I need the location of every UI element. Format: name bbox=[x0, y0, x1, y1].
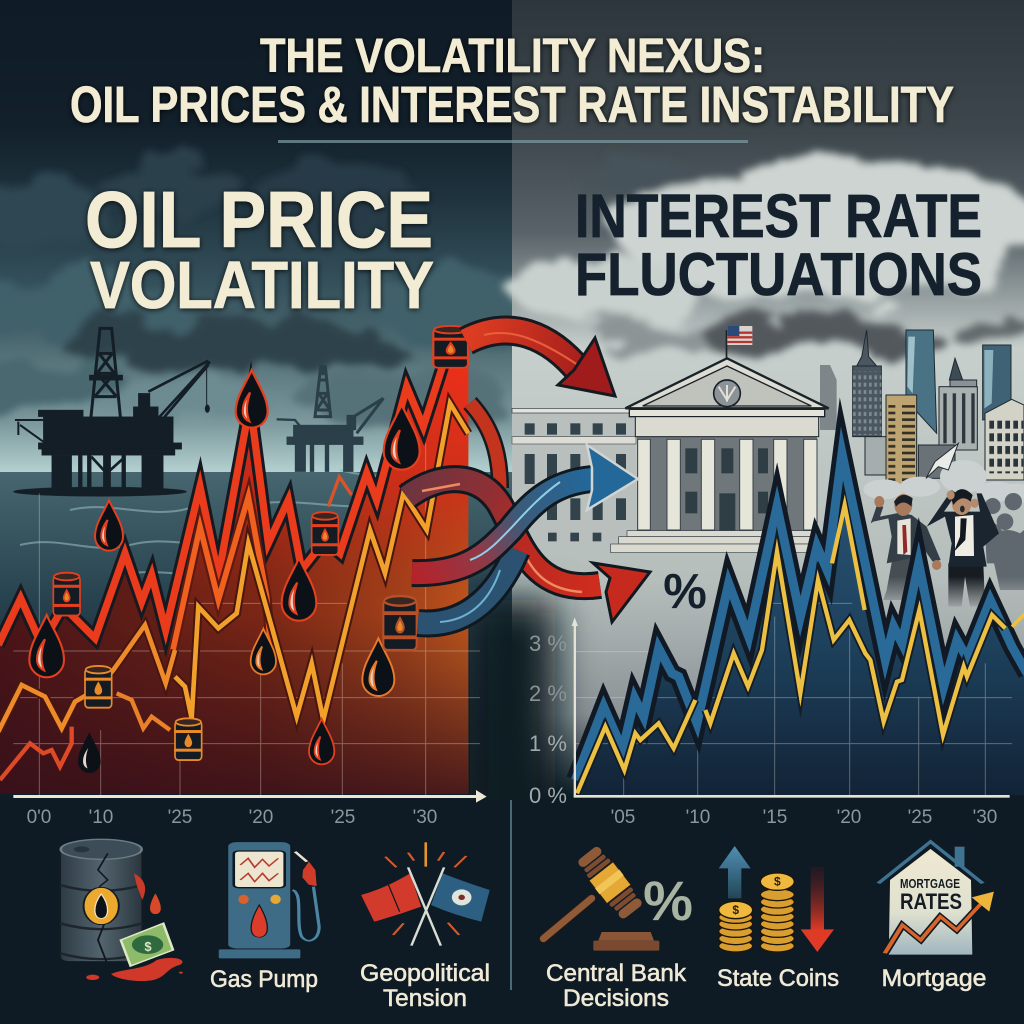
heading: interest rate fluctuations bbox=[575, 182, 982, 308]
mortgage sign text: RATES bbox=[900, 889, 962, 914]
mortgage sign text: MORTGAGE bbox=[900, 876, 960, 891]
distant oil rig bbox=[277, 365, 383, 472]
icon: mortgage house bbox=[878, 842, 994, 955]
skyline bbox=[820, 330, 1024, 487]
title: THE VOLATILITY NEXUS: bbox=[260, 30, 765, 83]
faint rising segment bbox=[328, 477, 352, 507]
chart area fill bbox=[0, 343, 468, 794]
icon: tall coin stack: $ bbox=[774, 875, 781, 889]
oil barrels on chart bbox=[53, 326, 468, 760]
icon: tall coin stack bbox=[760, 873, 794, 952]
left x axis labels: '30 bbox=[413, 807, 437, 828]
bottom icons row bbox=[60, 839, 994, 981]
mortgage sign text bbox=[900, 876, 962, 914]
footer band bbox=[0, 800, 1024, 1024]
icon: gas pump bbox=[219, 842, 319, 958]
icon captions: Decisions bbox=[563, 985, 669, 1012]
icon captions: Gas Pump bbox=[210, 966, 318, 993]
left x axis labels: '20 bbox=[249, 807, 273, 828]
left x axis labels bbox=[27, 807, 437, 828]
left y axis labels: 3 % bbox=[529, 631, 567, 656]
right x axis labels: '25 bbox=[908, 807, 932, 828]
x axis bbox=[13, 790, 487, 803]
curling red tail behind chart bbox=[470, 403, 500, 488]
heading: oil price volatility bbox=[85, 175, 434, 323]
icon captions: State Coins bbox=[717, 965, 839, 992]
icon: red down arrow bbox=[801, 867, 834, 952]
left illustration: offshore oil rigs bbox=[13, 328, 383, 496]
icon: short coin stack: $ bbox=[732, 903, 739, 917]
heading: oil price volatility: OIL PRICE bbox=[85, 175, 433, 264]
torn umbrella bbox=[926, 443, 958, 478]
man with raised fist bbox=[871, 494, 941, 600]
heading: oil price volatility: VOLATILITY bbox=[90, 248, 434, 323]
chart axes bbox=[572, 617, 1010, 798]
icon: cracked oil barrel bbox=[60, 839, 183, 981]
left y axis labels: 0 % bbox=[529, 783, 567, 808]
title divider bbox=[278, 140, 748, 143]
icon captions: Geopolitical bbox=[360, 960, 490, 987]
lower red line bbox=[0, 727, 72, 780]
heading: interest rate fluctuations: FLUCTUATIONS bbox=[575, 241, 982, 308]
panel divider bbox=[510, 800, 512, 990]
connecting arrows bbox=[407, 331, 650, 623]
dollar note symbol: $ bbox=[144, 939, 152, 954]
band from lower oil barrel bbox=[418, 550, 517, 623]
right x axis labels: '15 bbox=[763, 807, 787, 828]
chart area fill bbox=[575, 453, 1024, 795]
icon captions: Tension bbox=[383, 985, 467, 1012]
smoke cloud bbox=[863, 460, 1024, 503]
left wing bbox=[512, 408, 636, 548]
oil price line: red bbox=[0, 353, 447, 645]
icon: gavel bbox=[543, 844, 659, 951]
flag bbox=[726, 326, 752, 360]
right x axis labels: '05 bbox=[611, 807, 635, 828]
left y axis labels bbox=[529, 631, 567, 808]
right x axis labels: '10 bbox=[686, 807, 710, 828]
skyline and panicked crowd bbox=[820, 330, 1024, 610]
oil drops on chart bbox=[29, 370, 420, 773]
percent symbol: % bbox=[663, 565, 707, 619]
chart grid bbox=[575, 603, 1012, 795]
icon: blue up arrow bbox=[719, 846, 751, 898]
icons: gavel, coins and arrows bbox=[543, 844, 834, 952]
right x axis labels: '30 bbox=[973, 807, 997, 828]
left x axis labels: 0'0 bbox=[27, 807, 51, 828]
icon captions bbox=[210, 960, 986, 1012]
secondary line: orange red bbox=[166, 497, 271, 683]
arrow: curved red to percent bbox=[407, 479, 650, 622]
illustration: federal reserve bank bbox=[512, 326, 829, 553]
left x axis labels: '25 bbox=[168, 807, 192, 828]
left x axis labels: '25 bbox=[331, 807, 355, 828]
rate line: blue bbox=[575, 453, 1024, 780]
arrow: curved blue to bank bbox=[412, 445, 638, 573]
oil price line chart bbox=[0, 326, 487, 803]
fog at feet bbox=[863, 577, 1024, 610]
main oil rig bbox=[13, 328, 210, 496]
percent sign beside gavel: % bbox=[643, 869, 693, 932]
right x axis labels bbox=[611, 807, 997, 828]
panel: interest rate background bbox=[470, 0, 1024, 860]
amber line bbox=[0, 403, 468, 732]
right x axis labels: '20 bbox=[837, 807, 861, 828]
icon captions: Mortgage bbox=[882, 965, 986, 992]
left y axis labels: 2 % bbox=[529, 681, 567, 706]
interest rate line chart bbox=[572, 453, 1024, 798]
left y axis labels: 1 % bbox=[529, 731, 567, 756]
icon captions: Central Bank bbox=[546, 960, 687, 987]
title bbox=[70, 30, 954, 133]
background crowd bbox=[985, 493, 1024, 590]
man holding his head bbox=[927, 489, 999, 607]
chart grid bbox=[13, 443, 480, 795]
arrow: oil to bank red bbox=[466, 331, 615, 396]
panel: oil price background bbox=[0, 0, 550, 832]
icon: crossed flags bbox=[361, 842, 490, 946]
main bank portico bbox=[611, 358, 829, 553]
icon: short coin stack bbox=[719, 901, 753, 952]
left x axis labels: '10 bbox=[89, 807, 113, 828]
rate line: yellow bbox=[577, 505, 1024, 793]
